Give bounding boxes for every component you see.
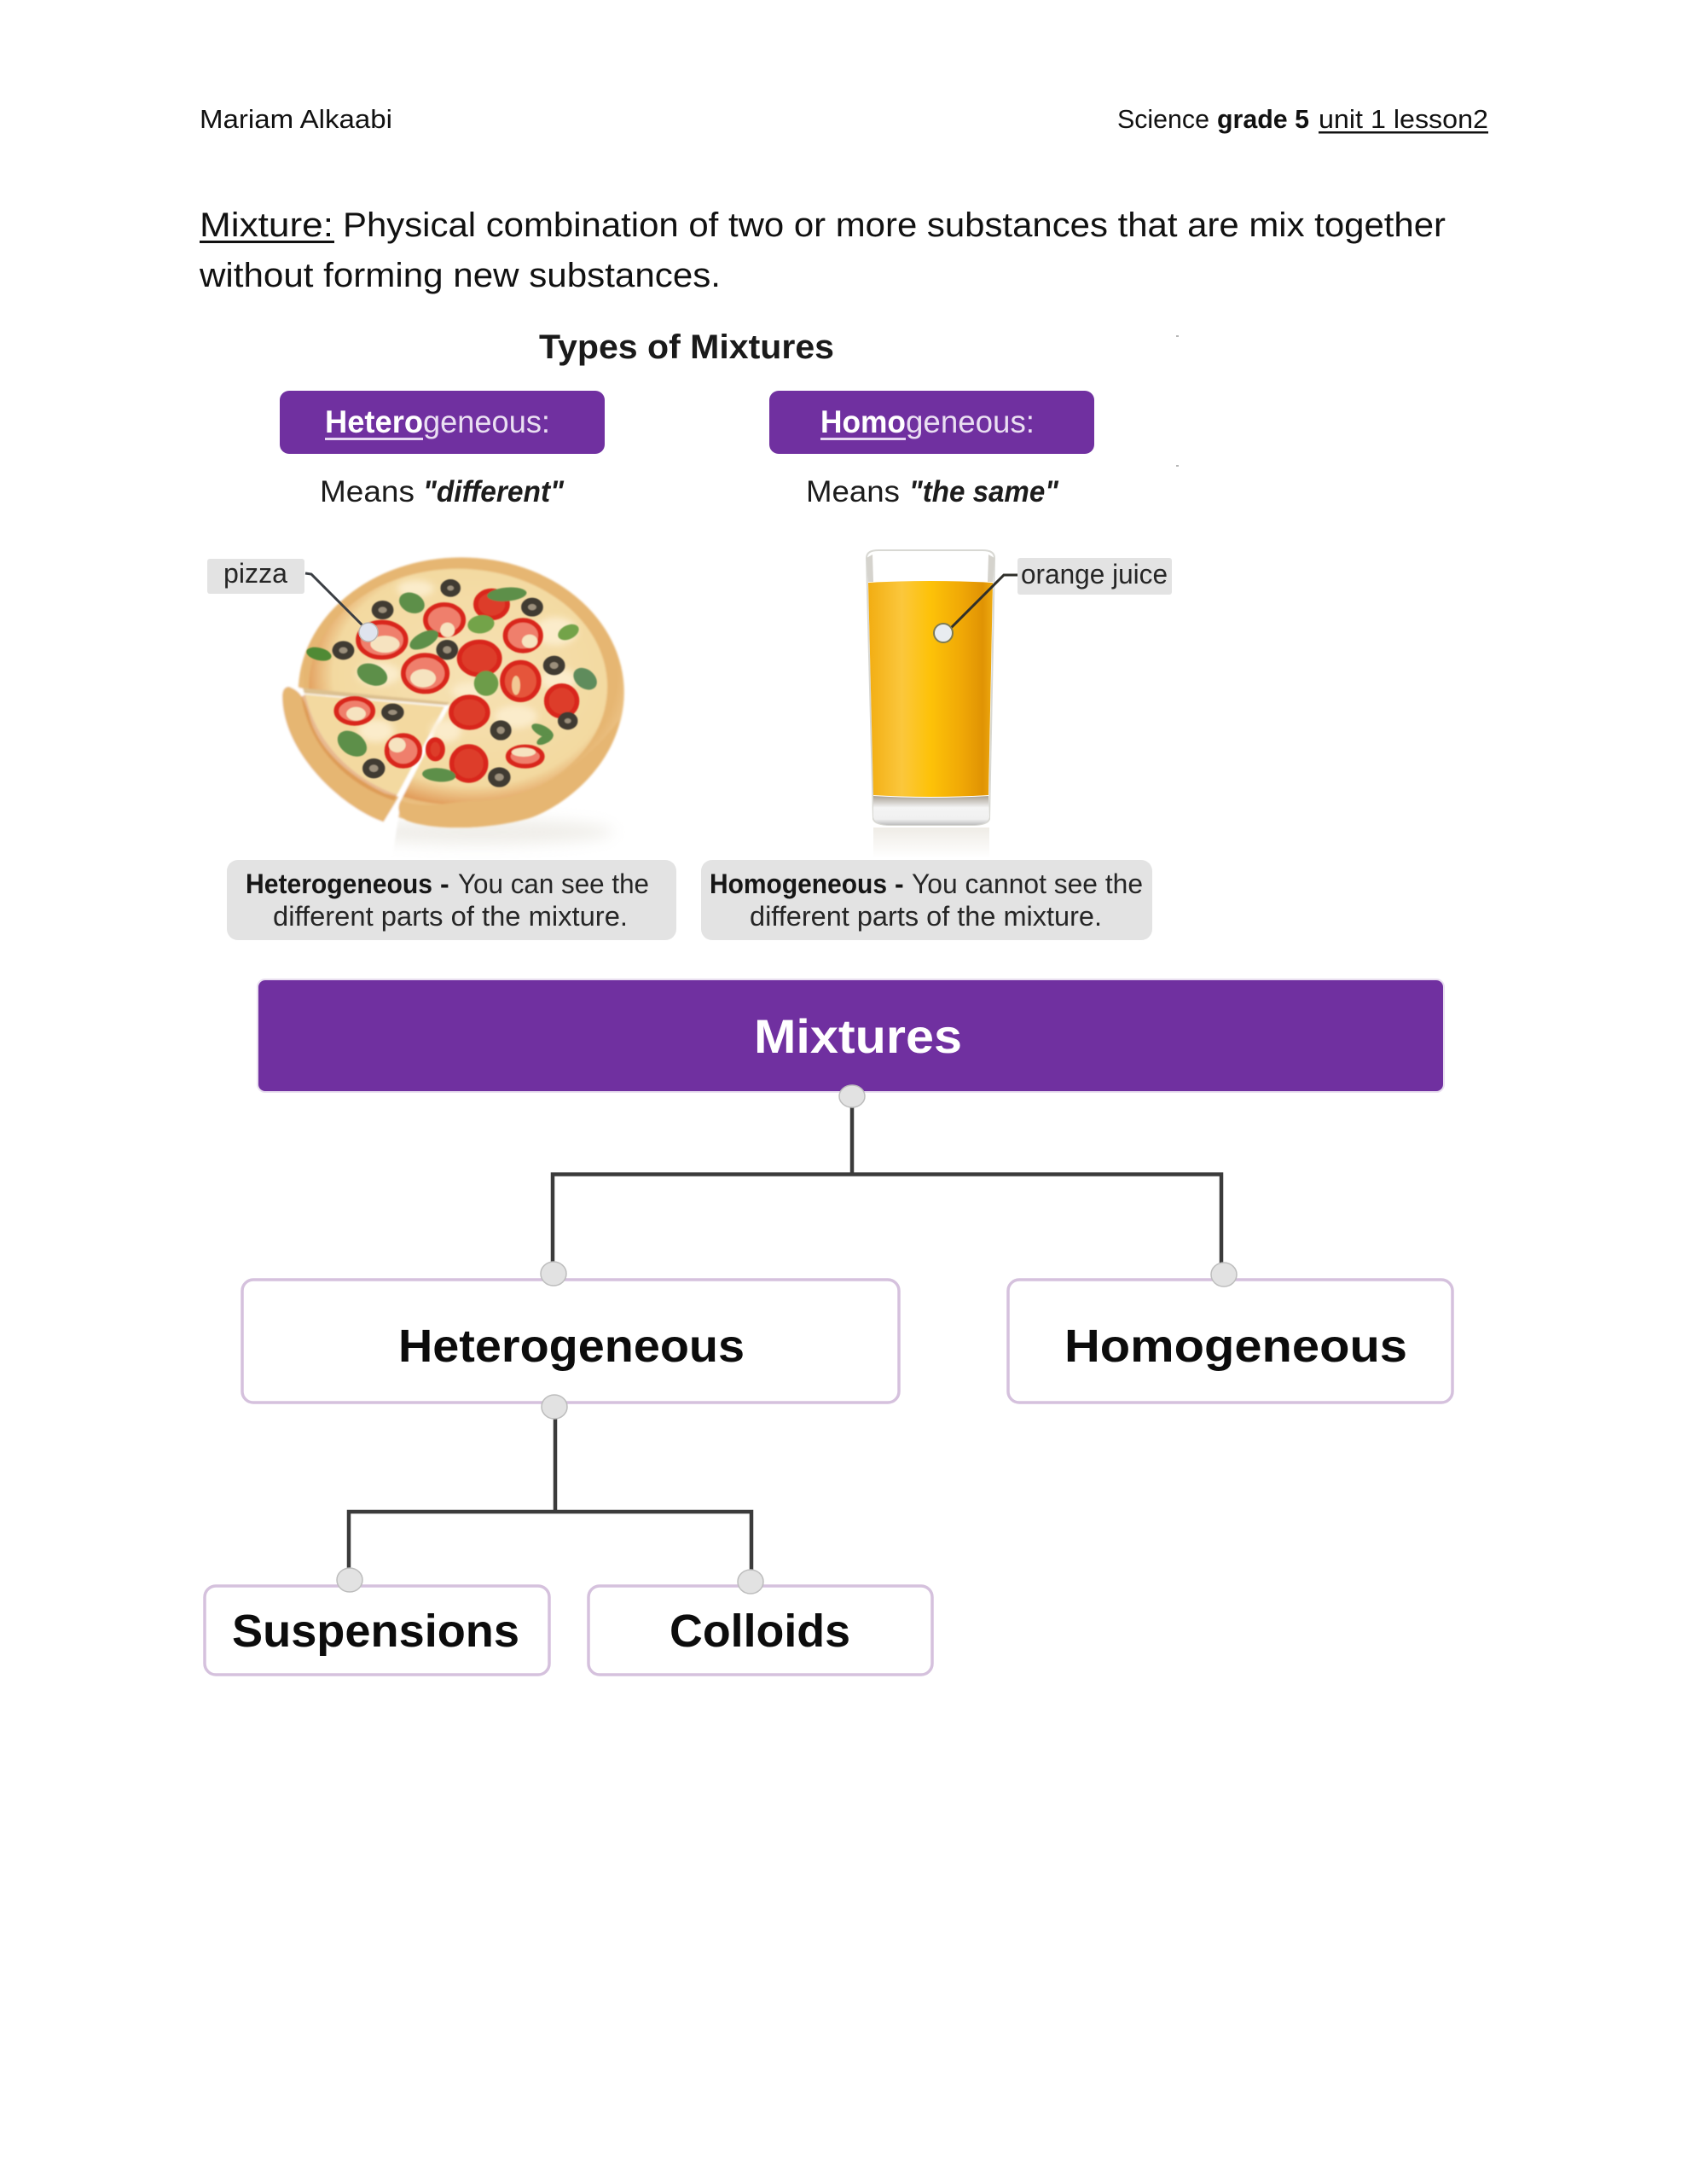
label: pizza	[207, 558, 304, 594]
badge: Heterogeneous	[280, 391, 605, 454]
badge: Homogeneous	[769, 391, 1094, 454]
connector node: Suspensions	[337, 1568, 362, 1592]
box: Colloids	[588, 1586, 932, 1675]
text: Means different	[320, 475, 564, 508]
definition text block	[199, 206, 1446, 294]
heading: Types of Mixtures: Types of Mixtures	[539, 328, 834, 366]
connector node: top of Homogeneous	[1211, 1263, 1237, 1287]
connector node: Mixtures	[839, 1085, 865, 1107]
box: Heterogeneous: Heterogeneous	[398, 1321, 745, 1372]
badge: Heterogeneous: geneous:	[423, 404, 550, 439]
text: Means the same	[806, 475, 1058, 508]
definition text block: without forming new substances.	[199, 257, 721, 294]
caption: homogeneous: Homogeneous	[710, 868, 887, 899]
box: Heterogeneous	[242, 1280, 899, 1403]
text: Means the same: "the same"	[909, 475, 1058, 508]
header: author name: Mariam Alkaabi	[200, 104, 392, 134]
header: subject and lesson	[1117, 104, 1488, 134]
caption: homogeneous: -	[895, 868, 904, 899]
stray image marks	[1176, 335, 1179, 467]
header: subject and lesson: grade 5	[1217, 104, 1309, 134]
caption: heterogeneous	[227, 860, 676, 940]
caption: heterogeneous: You can see the	[458, 868, 649, 899]
caption: homogeneous	[701, 860, 1152, 940]
pointer: orange juice	[934, 575, 1017, 642]
image: pizza	[251, 557, 624, 856]
label: pizza: pizza	[223, 558, 287, 589]
connector node: bottom of Heterogeneous	[542, 1395, 567, 1419]
pointer: pizza	[305, 573, 378, 642]
caption: heterogeneous: different parts of the mixture.	[273, 901, 628, 932]
label: orange juice: orange juice	[1021, 559, 1168, 590]
badge: Heterogeneous: Hetero	[325, 404, 423, 439]
text: Means different: "different"	[423, 475, 564, 508]
box: Homogeneous: Homogeneous	[1064, 1321, 1407, 1372]
caption: homogeneous: You cannot see the	[912, 868, 1143, 899]
header: subject and lesson: Science	[1117, 104, 1209, 134]
box: Suspensions	[205, 1586, 549, 1675]
connector node: top of Heterogeneous	[541, 1262, 566, 1286]
box: Suspensions: Suspensions	[232, 1606, 519, 1657]
connector lines: Heterogeneous to sub-types	[349, 1416, 751, 1577]
text: Means different: Means	[320, 475, 415, 508]
connector lines: Mixtures to types	[553, 1105, 1221, 1271]
text: Means the same: Means	[806, 475, 900, 508]
image: glass of orange juice	[867, 550, 994, 858]
box: Mixtures	[258, 979, 1444, 1092]
definition text block: Mixture:	[200, 206, 333, 244]
definition text block: Physical combination of two or more substances that are mix together	[343, 206, 1446, 244]
box: Homogeneous	[1008, 1280, 1452, 1403]
box: Mixtures: Mixtures	[754, 1009, 962, 1063]
badge: Homogeneous: Homo	[820, 404, 906, 439]
badge: Homogeneous: geneous:	[906, 404, 1035, 439]
caption: homogeneous: different parts of the mixture.	[750, 901, 1102, 932]
caption: heterogeneous: Heterogeneous	[246, 868, 432, 899]
header: subject and lesson: unit 1 lesson2	[1319, 104, 1488, 134]
connector node: Colloids	[738, 1570, 763, 1594]
caption: heterogeneous: -	[440, 868, 449, 899]
box: Colloids: Colloids	[670, 1606, 850, 1657]
